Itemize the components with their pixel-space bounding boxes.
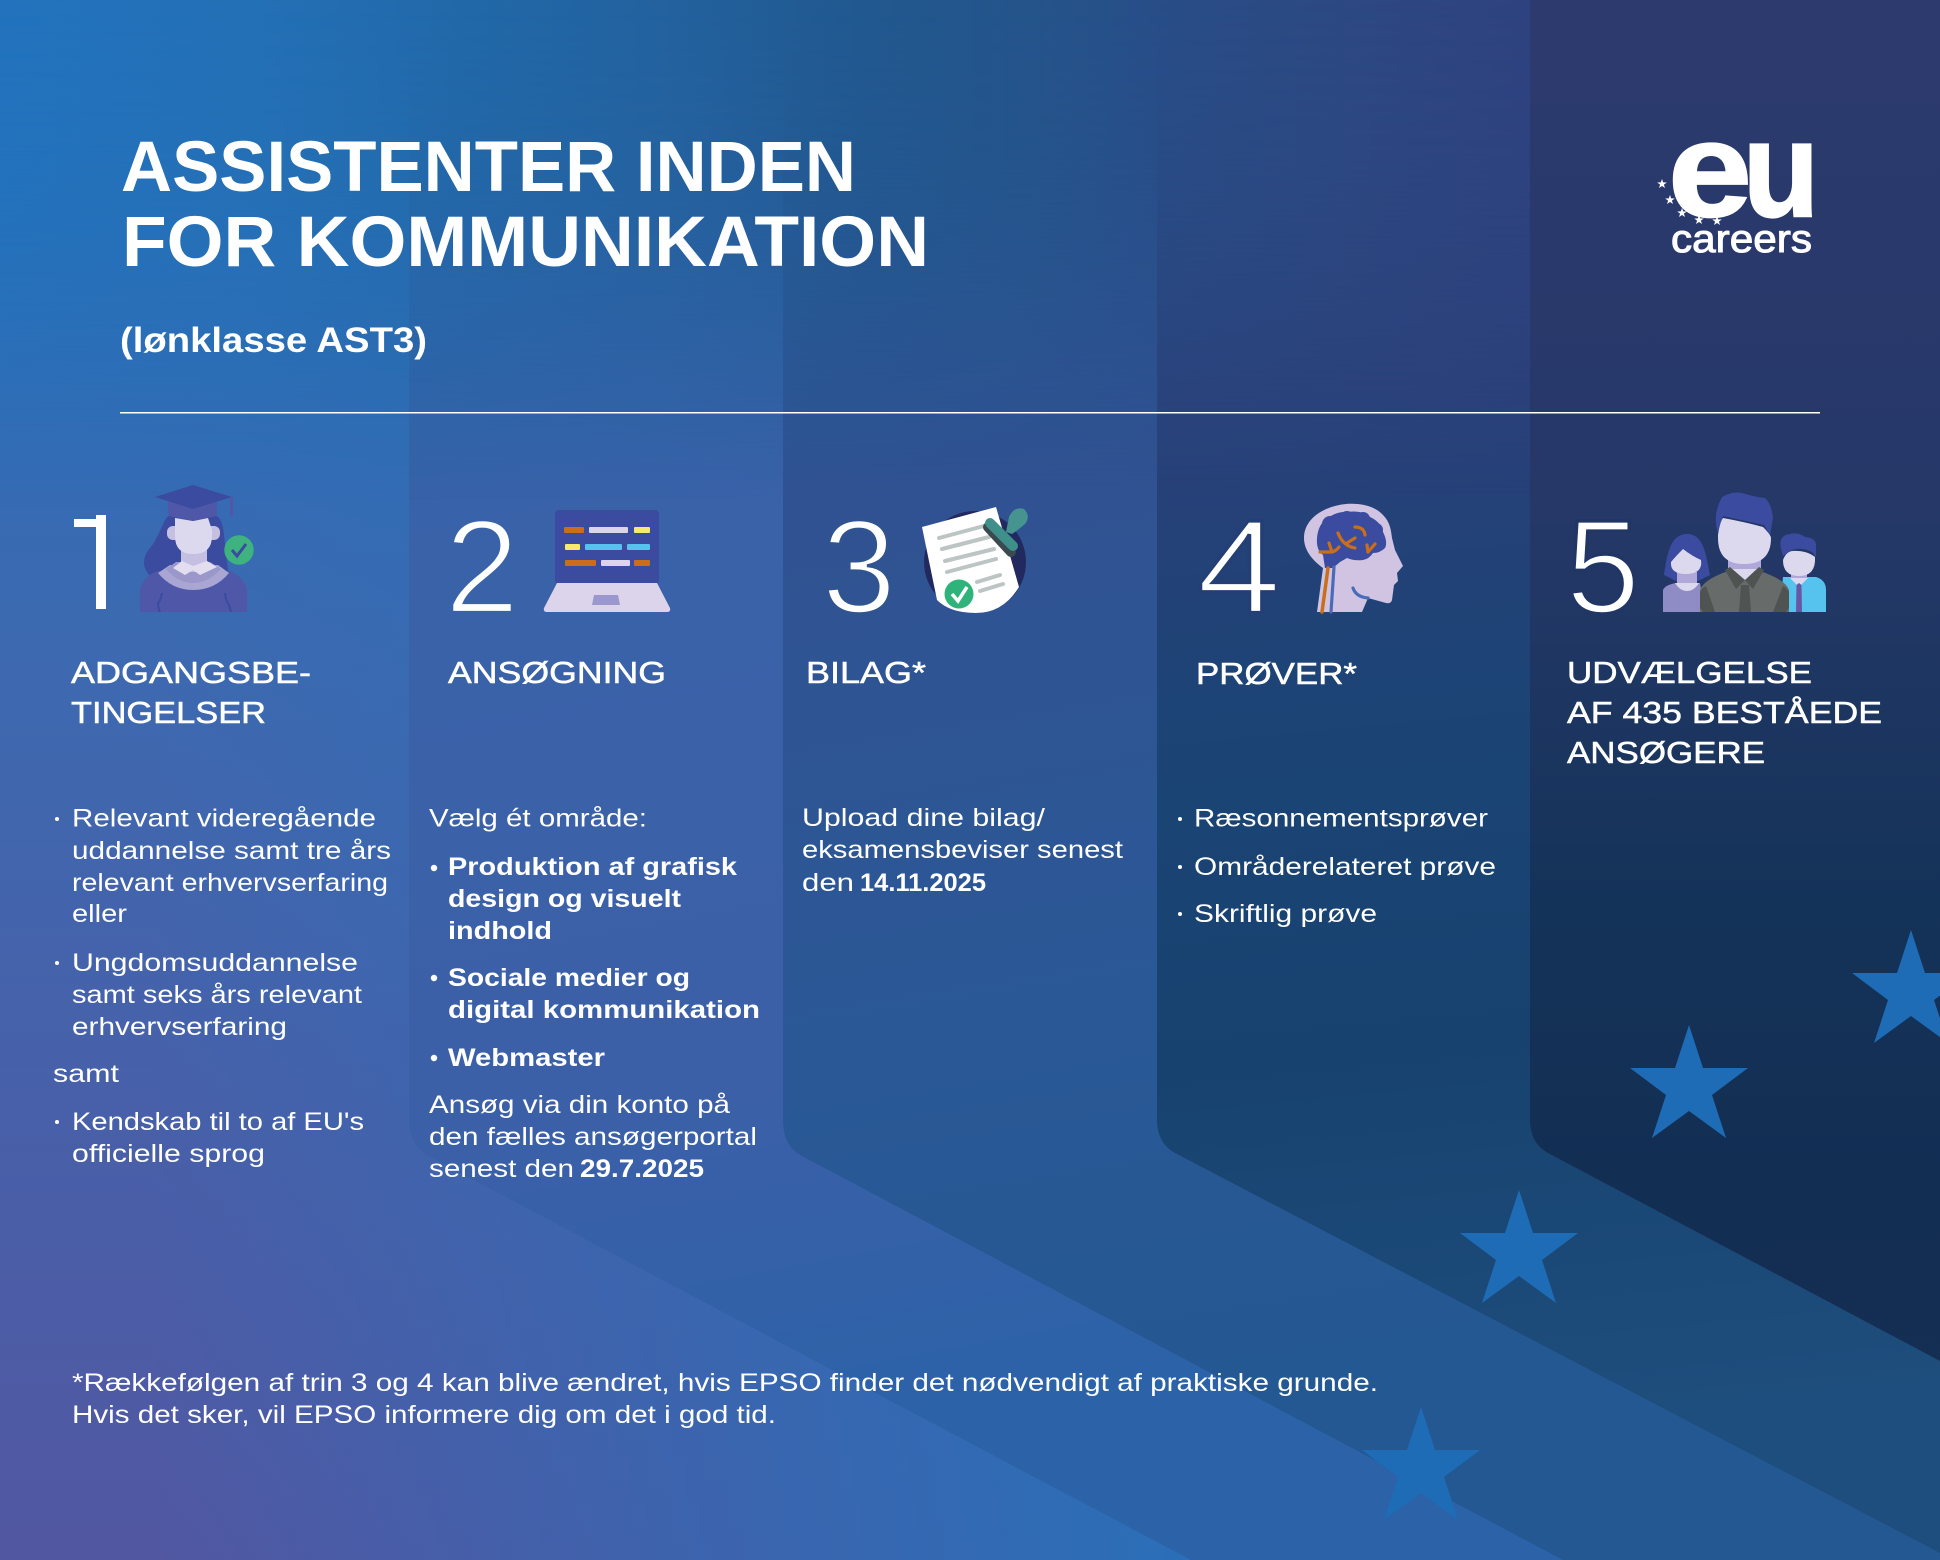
upload text: den — [802, 869, 854, 897]
application text: Ansøg via din konto på — [429, 1091, 730, 1119]
test list: Områderelateret prøve — [1194, 853, 1496, 881]
logo: EU careers: u — [1743, 94, 1819, 245]
heading: BILAG* — [806, 655, 926, 690]
heading: ADGANGSBE- — [71, 655, 311, 690]
upload text: 14.11.2025 — [860, 869, 986, 897]
application text: den fælles ansøgerportal — [429, 1123, 757, 1151]
test list — [1178, 804, 1496, 928]
application text: Vælg ét område: — [429, 804, 647, 832]
title — [121, 128, 929, 282]
requirements list: eller — [72, 900, 127, 928]
title: FOR KOMMUNIKATION — [122, 203, 929, 282]
test list: Ræsonnementsprøver — [1194, 804, 1488, 832]
upload text: Upload dine bilag/ — [802, 804, 1045, 832]
application text: Produktion af grafisk — [448, 853, 737, 881]
requirements list: samt seks års relevant — [72, 981, 362, 1009]
upload text: eksamensbeviser senest — [802, 836, 1123, 864]
icon: laptop — [544, 510, 670, 612]
requirements list: Kendskab til to af EU's — [72, 1108, 364, 1136]
application text: digital kommunikation — [448, 996, 760, 1024]
requirements list — [53, 804, 391, 1168]
number 4: 4 — [1197, 494, 1281, 642]
star 1 — [1852, 930, 1940, 1043]
application text: Sociale medier og — [448, 964, 690, 992]
application text: Webmaster — [448, 1044, 605, 1072]
heading: ANSØGNING — [448, 655, 666, 690]
requirements list: uddannelse samt tre års — [72, 837, 391, 865]
step 2: application — [429, 494, 760, 1183]
number 3: 3 — [822, 494, 896, 642]
icon: graduate — [140, 485, 254, 612]
upload text — [802, 804, 1123, 897]
star 4 — [1362, 1407, 1480, 1520]
heading: TINGELSER — [71, 695, 266, 730]
application text — [429, 804, 760, 1183]
icon: stamped document — [922, 507, 1028, 613]
requirements list: officielle sprog — [72, 1140, 265, 1168]
step 4: tests — [1178, 494, 1496, 928]
requirements list: relevant erhvervserfaring — [72, 869, 388, 897]
requirements list: Relevant videregående — [72, 804, 376, 832]
star 3 — [1460, 1190, 1578, 1303]
subtitle: (lønklasse AST3) — [120, 321, 427, 360]
icon: three people — [1663, 492, 1826, 612]
logo: EU careers — [1657, 94, 1819, 261]
step 1: eligibility — [53, 485, 391, 1168]
footnote: Hvis det sker, vil EPSO informere dig om det i god tid. — [72, 1401, 776, 1429]
application text: indhold — [448, 917, 552, 945]
application text: 29.7.2025 — [580, 1155, 704, 1183]
title: ASSISTENTER INDEN — [121, 128, 856, 207]
logo: EU careers: careers — [1671, 218, 1812, 261]
heading: AF 435 BESTÅEDE — [1567, 695, 1882, 730]
footnote: *Rækkefølgen af trin 3 og 4 kan blive ændret, hvis EPSO finder det nødvendigt af praktiske grunde. — [72, 1369, 1378, 1397]
heading: ANSØGERE — [1567, 735, 1765, 770]
number 1: 1 — [60, 490, 134, 638]
test list: Skriftlig prøve — [1194, 900, 1377, 928]
icon: head with brain — [1304, 504, 1403, 612]
number 1 — [74, 515, 106, 609]
heading — [71, 655, 311, 730]
application text: design og visuelt — [448, 885, 682, 913]
number 5: 5 — [1566, 494, 1640, 642]
step 5: selection — [1566, 492, 1882, 770]
requirements list: Ungdomsuddannelse — [72, 949, 358, 977]
step 3: attachments — [802, 494, 1123, 897]
requirements list: erhvervserfaring — [72, 1013, 287, 1041]
requirements list: samt — [53, 1060, 119, 1088]
logo: EU careers: e — [1668, 94, 1752, 245]
heading: PRØVER* — [1196, 656, 1357, 691]
star 2 — [1630, 1025, 1748, 1138]
decorative EU stars — [1362, 930, 1940, 1520]
footnote — [72, 1369, 1378, 1429]
heading — [1567, 655, 1882, 770]
application text: senest den — [429, 1155, 574, 1183]
number 2: 2 — [445, 494, 519, 642]
heading: UDVÆLGELSE — [1567, 655, 1812, 690]
